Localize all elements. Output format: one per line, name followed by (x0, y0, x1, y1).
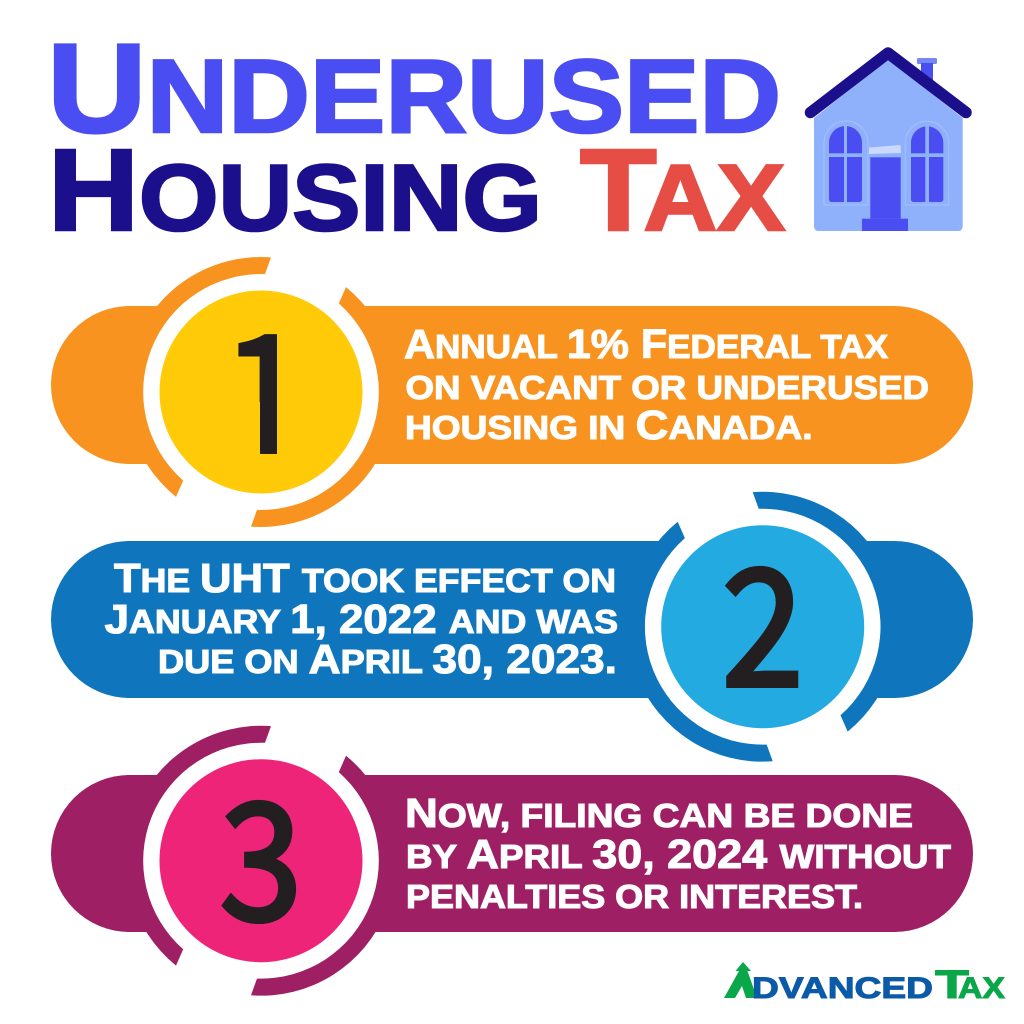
step 3 text (405, 790, 952, 916)
logo: Advanced Tax: DVANCED (752, 972, 933, 1005)
step 2 badge (628, 492, 898, 762)
step 2 bar (51, 541, 973, 698)
panel: step 1 (51, 257, 973, 527)
title line: Underused: UNDERUSED (47, 17, 781, 159)
logo: Advanced Tax (724, 962, 1005, 1007)
step 3 badge (126, 726, 396, 996)
step 1 text: ON VACANT OR UNDERUSED (406, 370, 929, 407)
step 2 text: DUE ON APRIL 30, 2023. (158, 636, 617, 682)
step 2 badge: 2 (722, 497, 804, 733)
step 3 text: PENALTIES OR INTEREST. (406, 879, 863, 916)
title (47, 17, 785, 255)
step 2 text (105, 555, 618, 682)
step 3 badge: 3 (220, 731, 302, 967)
step 3 text: NOW, FILING CAN BE DONE (405, 790, 913, 836)
icon: house (810, 53, 966, 231)
step 1 badge (143, 257, 379, 527)
step 1 badge: 1 (221, 264, 311, 499)
panel: step 2 (51, 492, 973, 762)
panel: step 3 (51, 726, 973, 996)
step 1 text: ANNUAL 1% FEDERAL TAX (404, 321, 889, 367)
step 1 text (404, 321, 929, 448)
step 1 bar (51, 306, 973, 464)
title word: Tax: TAX (580, 125, 785, 255)
logo: Advanced Tax: AX (958, 972, 1005, 1005)
step 3 bar (51, 775, 973, 932)
step 2 text: JANUARY 1, 2022 AND WAS (105, 596, 618, 642)
title line: Housing: HOUSING (48, 125, 542, 255)
step 1 text: HOUSING IN CANADA. (405, 402, 812, 448)
step 3 text: BY APRIL 30, 2024 WITHOUT (406, 831, 952, 877)
step 2 text: THE UHT TOOK EFFECT ON (114, 555, 616, 601)
logo: Advanced Tax: T (935, 963, 969, 1007)
